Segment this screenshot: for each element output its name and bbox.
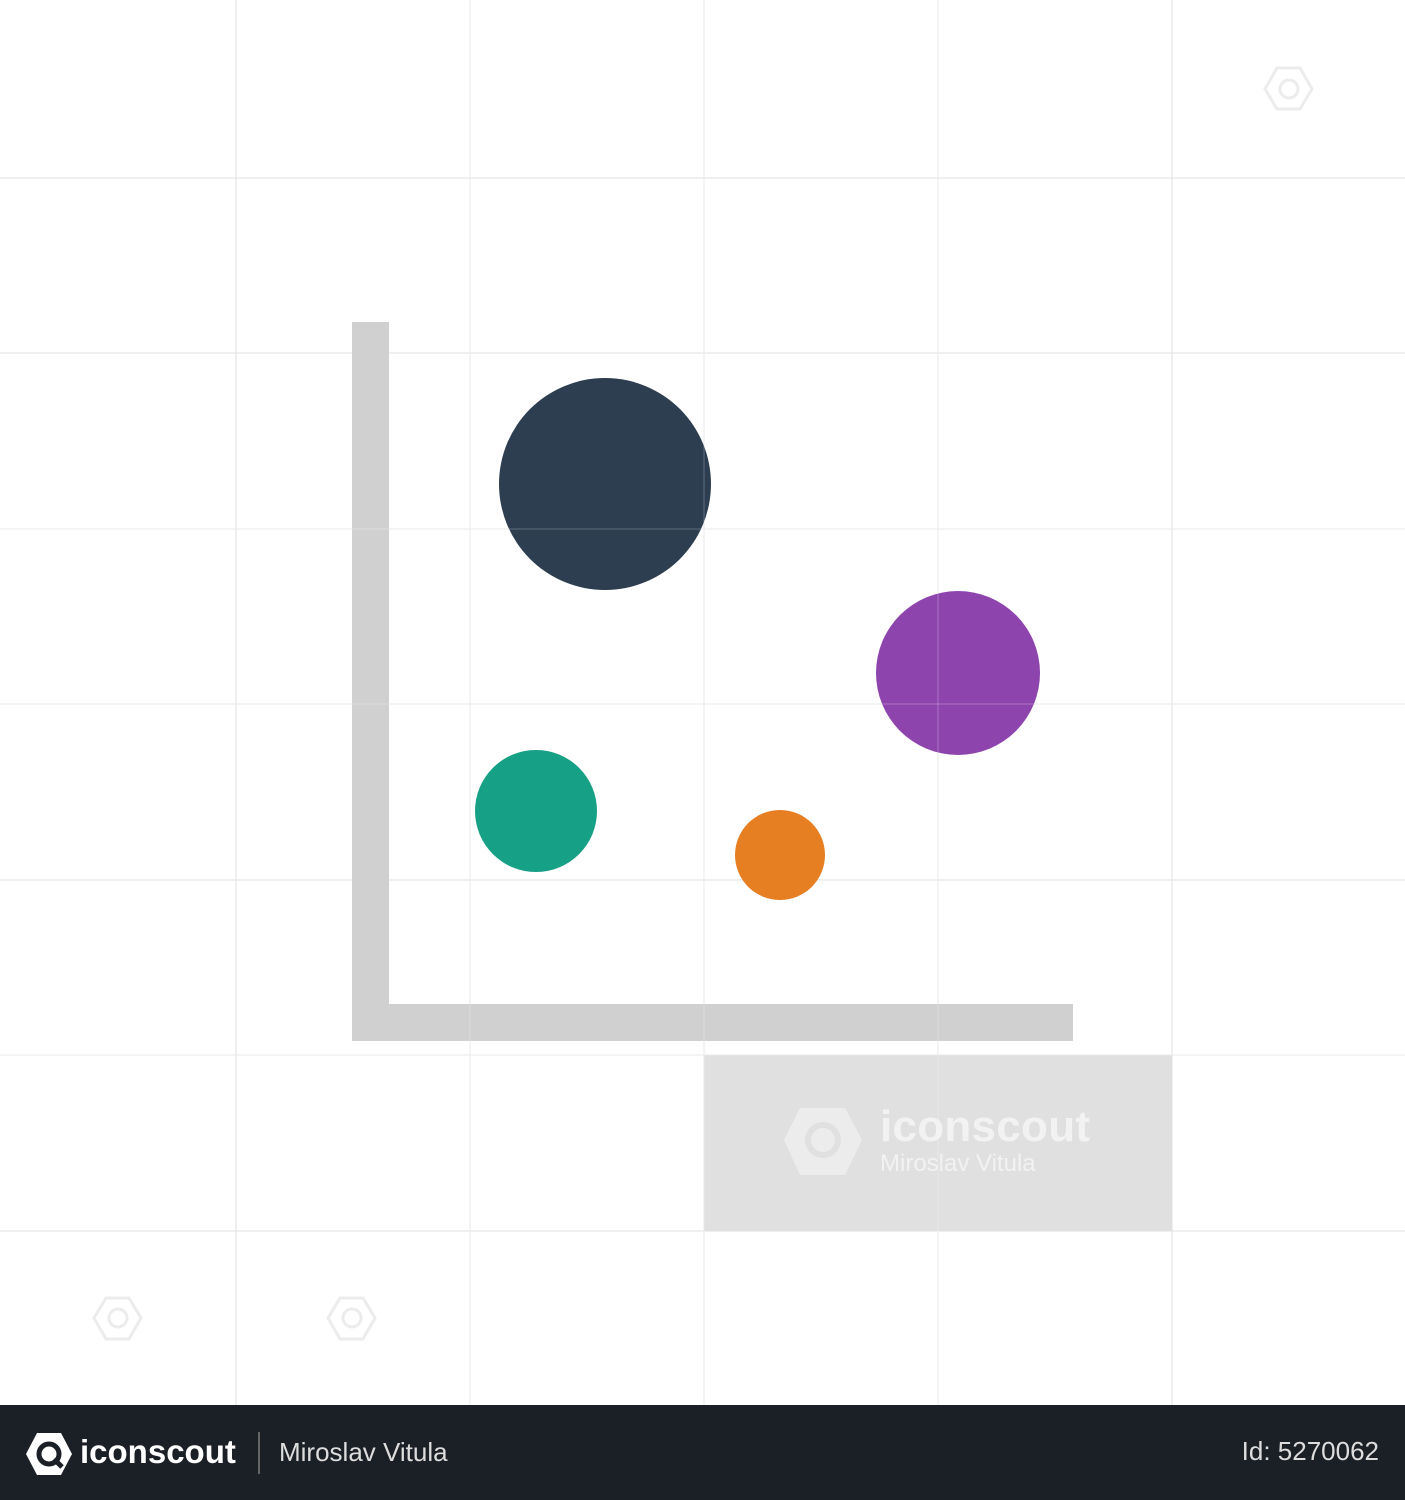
id: Id: 5270062: [1242, 1436, 1379, 1466]
bubble: purple: [876, 591, 1040, 755]
watermark box: [704, 1055, 1172, 1231]
chart axes: [352, 322, 1073, 1041]
watermark box: Miroslav Vitula: [880, 1150, 1036, 1177]
watermark box: iconscout: [880, 1102, 1090, 1151]
icon: logo: [26, 1433, 72, 1475]
footer: [0, 1405, 1405, 1500]
small watermark icons: [94, 68, 1312, 1339]
bubble: teal: [475, 750, 597, 872]
brand text: iconscout: [80, 1433, 236, 1470]
bubble: orange: [735, 810, 825, 900]
bubble: dark: [499, 378, 711, 590]
author: Miroslav Vitula: [279, 1437, 448, 1467]
